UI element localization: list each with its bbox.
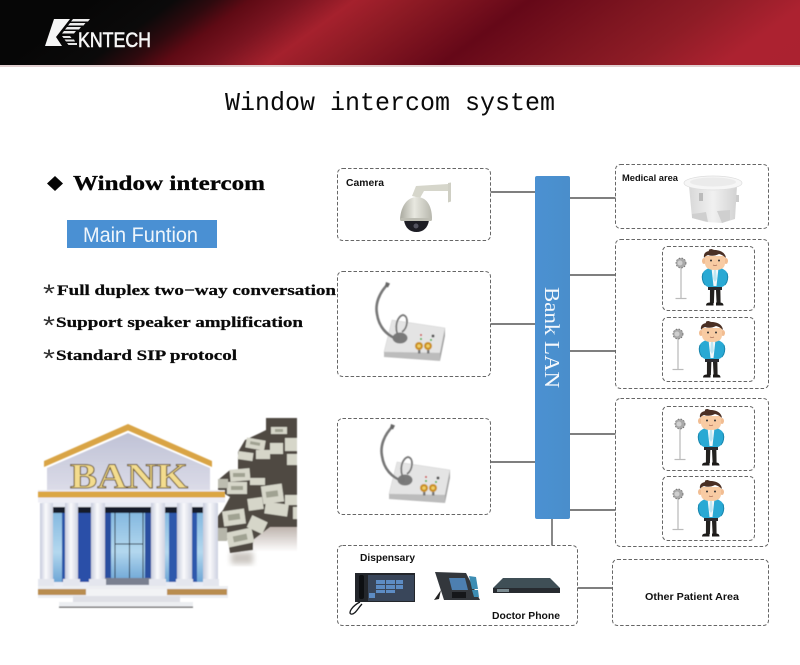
panel: dispensary: Doctor Phone bbox=[492, 610, 560, 622]
feature list: * bbox=[43, 280, 55, 308]
station: speaker and person bbox=[662, 476, 754, 540]
section heading: Window intercom: Window intercom bbox=[73, 171, 266, 195]
feature list: Support speaker amplification bbox=[56, 315, 304, 331]
panel: dispensary: Dispensary bbox=[360, 552, 415, 564]
feature list: * bbox=[43, 312, 55, 340]
bus: Bank LAN: Bank LAN bbox=[540, 287, 564, 388]
illustration: bank building bbox=[38, 424, 228, 608]
icon: desk IP phone bbox=[434, 572, 480, 600]
pediment bbox=[47, 433, 210, 491]
station: speaker and person bbox=[662, 318, 754, 382]
roof bbox=[44, 424, 212, 467]
icon: rack server bbox=[493, 578, 560, 593]
feature list bbox=[43, 280, 337, 373]
icon: touchscreen console bbox=[350, 573, 415, 614]
network links bbox=[490, 192, 690, 588]
columns bbox=[38, 503, 219, 586]
panel: camera: Camera bbox=[346, 178, 384, 189]
cornice bbox=[38, 490, 225, 502]
panel: medical area: Medical area bbox=[622, 173, 679, 183]
panel: window intercom unit 1 bbox=[338, 272, 490, 376]
station: speaker and person bbox=[662, 246, 754, 310]
feature list: Standard SIP protocol bbox=[56, 348, 237, 364]
icon: dome camera bbox=[400, 182, 451, 232]
panel: patient group 1 bbox=[616, 240, 768, 388]
button: Main Funtion bbox=[67, 220, 217, 248]
illustration: money stacks bbox=[216, 418, 297, 564]
logo: KNTECH bbox=[45, 19, 151, 52]
icon: ceiling speaker bbox=[684, 176, 742, 223]
panel: other patient area: Other Patient Area bbox=[645, 592, 739, 603]
header banner bbox=[0, 0, 800, 67]
facade wall bbox=[42, 502, 217, 586]
panel: camera bbox=[338, 168, 490, 240]
icon: gooseneck intercom bbox=[376, 282, 445, 361]
sign: BANK: BANK bbox=[70, 456, 188, 496]
steps bbox=[59, 589, 193, 608]
panel: medical area bbox=[616, 164, 768, 228]
logo: KNTECH: KNTECH bbox=[78, 28, 151, 52]
feature list: * bbox=[43, 345, 55, 373]
feature list: Full duplex two−way conversation bbox=[57, 283, 337, 299]
button: Main Funtion: Main Funtion bbox=[83, 224, 198, 247]
panel: other patient area bbox=[612, 560, 768, 626]
plinth bbox=[38, 586, 228, 598]
panel: patient group 2 bbox=[616, 398, 768, 546]
bus: Bank LAN bbox=[535, 176, 570, 519]
panel: window intercom unit 2 bbox=[338, 418, 490, 514]
panel: dispensary bbox=[338, 546, 578, 626]
title: Window intercom system bbox=[225, 88, 555, 118]
windows and door bbox=[53, 507, 203, 585]
station: speaker and person bbox=[662, 406, 754, 470]
icon: gooseneck intercom bbox=[381, 424, 450, 503]
